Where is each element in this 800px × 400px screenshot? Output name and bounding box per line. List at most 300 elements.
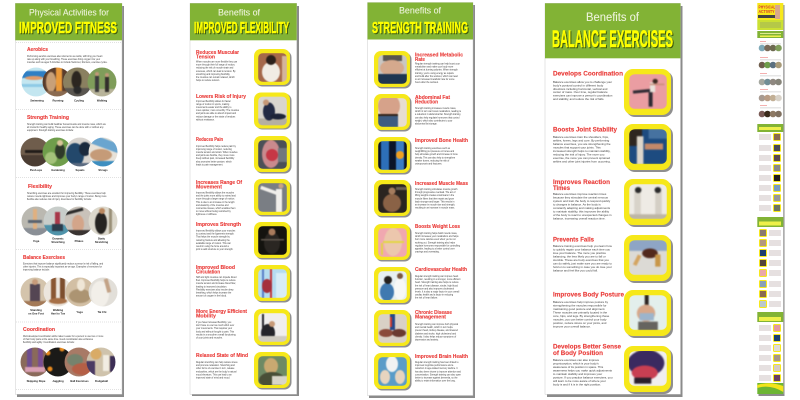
benefit: increases range of movement: to move without being restricted by — [196, 210, 232, 213]
benefit: cardiovascular health — [415, 267, 467, 300]
activity labels: Yoga — [33, 239, 40, 243]
benefit: reduces muscular tension: When muscles are more flexible they can — [196, 60, 238, 64]
photo: ball exercises — [64, 348, 90, 376]
benefit: abdominal fat reduction: weight, which also contributes to your — [415, 119, 453, 122]
benefit: boosts joint stability: Balance exercises train the shoulders, hips, — [553, 135, 609, 139]
section: flexibility: Stretching exercises are excellent for improving flexibility. These exercises help — [27, 192, 106, 195]
benefit: increased muscle mass: through progressive overload. The act of — [415, 191, 456, 194]
benefit: boosts joint stability: Boosts Joint Stability — [553, 126, 617, 134]
tile: muscular man — [374, 180, 412, 218]
activity labels: Stretching — [51, 240, 65, 244]
activity labels: Squats — [76, 168, 85, 172]
benefit: increased metabolic rate: Increased Metabolic — [415, 52, 463, 58]
benefit: chronic disease management: and mental health, which in turn helps — [415, 326, 454, 329]
benefit: more energy efficient mobility: of your joints and muscles. — [196, 336, 223, 340]
benefit: improves reaction times: because they stimulate the central nervous — [553, 196, 609, 200]
benefit: increased muscle mass: back stronger and larger. This results in — [415, 200, 455, 203]
section: strength training: Strength training can build healthier bones/muscle and muscle mass, which are — [27, 123, 107, 126]
tile: man stretching at desk — [254, 309, 292, 346]
activity labels: Dynamic — [52, 236, 64, 240]
section: flexibility: flexible also reduces risk of injury. Exercises for flexibility include: — [27, 198, 92, 201]
benefit: develops better sense of body position: to maintain stability and improves your — [553, 372, 602, 376]
panel: physical activities for improved fitness — [15, 3, 124, 397]
benefit: abdominal fat reduction — [415, 95, 462, 126]
benefit: improved blood circulation: breathing, which helps increase the — [196, 292, 232, 294]
benefit: reduces pain: Reduces Pain — [196, 137, 223, 143]
benefit: develops coordination: directions including horizontal, vertical and — [553, 87, 608, 91]
benefit: more energy efficient mobility: Mobility — [196, 314, 216, 320]
section: balance exercises: Balance Exercises — [23, 255, 65, 261]
mini header: physical activity: PHYSICAL — [758, 4, 776, 10]
section: aerobics — [21, 47, 117, 102]
header: improved flexibility — [190, 3, 297, 40]
benefit: chronic disease management: obesity. It also helps reduce symptoms of — [415, 335, 456, 338]
benefit: improves reaction times: Improves Reaction — [553, 179, 610, 186]
section: strength training — [20, 115, 122, 172]
benefit: improves body posture: improve your overall balance. — [553, 324, 591, 328]
benefit: develops better sense of body position: Balance exercises can also improve — [553, 358, 600, 362]
benefit: reduces muscular tension: Reduces Muscular — [196, 50, 239, 56]
photo: swimming — [22, 68, 46, 96]
benefit: more energy efficient mobility: your movements. That requires your — [196, 327, 232, 330]
benefit: improved brain health: reduction in age-related memory decline. It — [415, 367, 458, 370]
benefit: lowers risk of injury: Lowers Risk of Injury — [196, 94, 246, 100]
benefit: improves strength: available range of motion. This can — [196, 242, 232, 245]
benefit: reduces pain: improving range of motion, reducing — [196, 148, 233, 151]
photo: static stretching — [88, 206, 118, 236]
benefit: boosts weight loss: cravings and overeating. — [415, 251, 440, 254]
activity labels: Cycling — [74, 98, 84, 102]
benefit: improves body posture: core, hips, and legs. By strengthening these — [553, 314, 610, 318]
benefit: improved bone health: Improved Bone Health — [415, 138, 468, 144]
activity labels: Yoga — [76, 310, 83, 314]
benefit: develops coordination: and stability, and reduce the risk of falls. — [553, 97, 604, 101]
benefit: improved blood circulation: Improved Blood — [196, 265, 235, 271]
benefit: improved bone health: help stimulate growth and increase in bone — [415, 153, 459, 156]
benefit: increased metabolic rate: Regular strength training can help boost your — [415, 62, 460, 66]
benefit: cardiovascular health: heart. Strength training also helps to reduce — [415, 281, 459, 284]
benefit: improves strength: That helps the muscle strength by — [196, 236, 231, 239]
benefit: improves strength: result in using the force around a — [196, 245, 230, 248]
benefit: improves reaction times: to changes in balance. As the body is — [553, 202, 601, 206]
benefit: improves strength: joint to add structure to your strength. — [195, 248, 234, 251]
benefit: increases range of movement: move through a larger range of motion. — [196, 198, 235, 201]
benefit: improved brain health: improved cognitive performance and a — [415, 364, 454, 367]
header: improved fitness: Physical Activities for — [29, 8, 109, 18]
benefit: increased muscle mass: Increased Muscle Mass — [415, 181, 468, 187]
photo: standing on one foot — [20, 278, 46, 306]
tile: woman balancing on one leg — [624, 69, 673, 117]
benefit: improved brain health — [415, 354, 468, 383]
benefit: develops better sense of body position: body is and if it is in the right position. — [553, 382, 601, 386]
benefit: improves body posture — [553, 292, 624, 328]
benefit: increases range of movement: tightness or stiffness. — [196, 213, 217, 216]
tile: woman posture from behind — [624, 290, 673, 338]
photo: push-ups — [20, 138, 46, 166]
tile: joint stability — [624, 124, 673, 172]
benefit: increased metabolic rate: and build after the workout, which can lead — [415, 75, 458, 78]
activity labels: Skipping Rope — [27, 379, 46, 383]
benefit: prevents falls: Balance training exercises help you learn how — [553, 244, 613, 248]
photo: dynamic stretching — [44, 206, 68, 236]
benefit: reduces muscular tension: Tension — [196, 54, 215, 60]
header: strength training: Benefits of — [399, 6, 441, 16]
header: balance exercises: Benefits of — [586, 12, 640, 24]
activity labels: Ball Exercises — [70, 379, 89, 383]
benefit: increased muscle mass: resulting in an increase in muscle mass. — [415, 207, 455, 210]
benefit: increased metabolic rate: metabolism and make your body more — [415, 66, 454, 69]
benefit: improves reaction times — [553, 179, 612, 220]
panel: benefits of improved flexibility — [190, 3, 299, 396]
tile: painful hip — [254, 136, 292, 174]
benefit: boosts weight loss: regulate hormones responsible for controlling — [415, 244, 461, 247]
activity labels: Shrugs — [98, 168, 108, 172]
photo: running — [42, 68, 68, 96]
activity labels: Swimming — [30, 98, 44, 102]
photo: dodgeball — [86, 347, 116, 377]
benefit: prevents falls: balance and feel like you could fall. — [553, 268, 598, 272]
header: improved fitness: IMPROVED FITNESS — [19, 20, 117, 37]
benefit: increases range of movement: Movement — [196, 184, 222, 190]
benefit: improves body posture: muscles, you can better control your body — [553, 318, 607, 322]
benefit: relaxed state of mind: and promote relaxation. Stretching and — [196, 364, 236, 367]
panel: benefits of strength training — [368, 2, 475, 398]
panel: full combined miniature poster — [757, 3, 784, 396]
section: coordination — [20, 327, 116, 383]
benefit: improved brain health: concentration. Strength training can also open — [415, 373, 462, 376]
benefit: prevents falls: balancing, the less likely you are to fall or — [553, 254, 606, 258]
tile: leg stretch — [254, 179, 292, 216]
benefit: improved blood circulation: Circulation — [196, 270, 220, 276]
benefit: increases range of movement: connective tissues, which enables them — [196, 207, 236, 210]
activity labels: Walking — [97, 98, 107, 102]
benefit: cardiovascular health: Cardiovascular Health — [415, 267, 467, 273]
benefit: improves reaction times: balance, increasing overall reaction time. — [553, 216, 606, 220]
header: strength training: STRENGTH TRAINING — [372, 20, 468, 37]
benefit: develops coordination — [553, 70, 623, 101]
benefit: improves body posture: strengthening the muscles responsible for — [553, 304, 607, 308]
section: flexibility — [21, 184, 118, 244]
benefit: develops coordination: Balance exercises allow you to challenge your — [553, 80, 612, 84]
benefit: relaxed state of mind: Relaxed State of Mind — [196, 353, 248, 359]
benefit: prevents falls: stumble. These are body exercises that you — [553, 258, 609, 262]
benefit: reduces muscular tension: reducing the risk of muscle strain and — [196, 67, 234, 70]
benefit: abdominal fat reduction: Reduction — [415, 100, 438, 106]
activity labels: Standing — [30, 308, 42, 312]
photo: shrugs — [88, 138, 118, 166]
benefit: improves reaction times: constantly adapting and making adjustments — [553, 206, 611, 210]
benefit: boosts weight loss: appetite, leading to a better control over — [415, 248, 455, 250]
benefit: develops better sense of body position — [553, 344, 621, 386]
benefit: develops better sense of body position: will learn to be more aware of where your — [553, 379, 606, 383]
activity labels: Running — [53, 98, 64, 102]
mini tiles: balance benefits — [759, 324, 781, 382]
mini banner: balance exercises — [757, 312, 783, 322]
benefit: increases range of movement: Improved flexibility allows the muscles — [196, 192, 235, 194]
benefit: relaxed state of mind: endorphins, which are the body's natural — [196, 370, 237, 373]
benefit: increases range of movement: This is due to an increase in the length — [196, 201, 235, 204]
mini footer band — [757, 383, 783, 394]
photo: pilates — [64, 206, 91, 236]
benefit: cardiovascular health: the risk of heart failure. — [415, 297, 438, 300]
section: balance exercises: Exercises that improve balance significantly reduce a person's risk of falling, and — [23, 262, 104, 266]
benefit: lowers risk of injury: movements easier and the ability to — [196, 106, 232, 109]
activity labels: Juggling — [52, 379, 64, 383]
tile: knee x-ray — [374, 137, 412, 174]
activity labels: Heel to Toe — [51, 312, 66, 316]
benefit: boosts weight loss: burn more calories even when you're not — [415, 238, 456, 241]
benefit: improved blood circulation: Flexibility exercises also involve deep — [196, 288, 234, 291]
benefit: improved blood circulation: amount of oxygen in the blood. — [196, 295, 227, 298]
mini banner: strength training — [757, 217, 783, 227]
benefit: abdominal fat reduction: abdominal fat storage. — [415, 122, 438, 126]
benefit: abdominal fat reduction: Strength training increases muscle mass, — [415, 107, 457, 110]
activity labels: Stretching — [95, 240, 108, 244]
tile: falling blocks — [624, 235, 673, 283]
benefit: develops better sense of body position: awareness of its position in space. This — [553, 365, 604, 369]
benefit: improves body posture: Improves Body Posture — [553, 292, 624, 298]
benefit: lowers risk of injury: move quicker, more smoothly. The muscles — [196, 109, 240, 112]
benefit: improves strength: reducing fracture and allowing the — [196, 239, 231, 242]
mini tiles: flexibility benefits — [759, 133, 781, 212]
benefit: abdominal fat reduction: Abdominal Fat — [415, 95, 450, 101]
benefit: increases range of movement: and the joints more ability to extend and — [196, 195, 237, 198]
benefit: improved bone health: Strength training exercises such as — [415, 147, 451, 150]
benefit: improved brain health: better to increase against dementia, so the — [415, 376, 458, 380]
tile: woman stretching — [254, 49, 292, 86]
benefit: increased muscle mass: lifting weights creates small tears in the — [415, 194, 455, 197]
photo: tai chi — [88, 277, 118, 307]
section: flexibility: reduce muscle tightness and improves your body's range of motion. Being more — [27, 195, 107, 198]
benefit: improves reaction times: to maintain stability, this improves the ability — [553, 210, 610, 214]
tile: waist pinch — [374, 94, 412, 132]
section: aerobics: Aerobics — [27, 47, 48, 53]
benefit: improves body posture: position, reduce stress on your joints, and — [553, 321, 607, 325]
section: flexibility: Flexibility — [28, 184, 52, 190]
benefit: reduces pain: and joints are flexible, they move more — [196, 154, 235, 157]
benefit: relaxed state of mind — [196, 353, 248, 380]
benefit: chronic disease management: Chronic Disease — [415, 310, 452, 316]
benefit: relaxed state of mind: other forms of exercise in turn, release — [196, 367, 235, 370]
benefit: improved bone health: weightlifting put pressure on bones and — [415, 150, 455, 153]
activity labels: Walking — [53, 308, 63, 312]
benefit: develops better sense of body position: Develops Better Sense — [553, 344, 621, 350]
photo: yoga balance — [66, 278, 92, 306]
section: balance exercises: improving balance include: — [23, 268, 50, 272]
benefit: improved brain health: has also been shown to improve attention and — [415, 370, 462, 373]
benefit: reduces pain: Improved flexibility helps reduce pain by — [196, 145, 237, 148]
photo: gardening — [42, 138, 68, 166]
tile: reaction times fencing — [624, 179, 673, 227]
benefit: improved bone health: osteoporosis and fractures. — [415, 162, 443, 166]
benefit: prevents falls: hold on to something in case you do lose your — [553, 265, 612, 269]
benefit: improved blood circulation — [196, 265, 237, 298]
benefit: reduces muscular tension: helps to reduce tension. — [196, 79, 220, 82]
benefit: improved bone health: density. This can also help to strengthen — [415, 156, 456, 159]
tile: glowing brain hands — [374, 353, 412, 390]
tile: abdomen hands — [374, 51, 412, 88]
tile: silhouette double exposure — [624, 346, 673, 394]
benefit: lowers risk of injury: reduce damage or the strain of tendons — [196, 115, 236, 118]
benefit: improved bone health: weaker bones, reducing the risk of — [415, 159, 450, 162]
benefit: increased metabolic rate: Rate — [415, 57, 425, 63]
photo: skipping rope — [20, 348, 46, 376]
benefit: boosts joint stability: ankles and other joint injuries from occurring. — [553, 160, 611, 164]
section: aerobics: muscles such as ages 5 Activities to include Swimmer, Runners, exercise cycles. — [27, 61, 108, 64]
benefit: increased metabolic rate: efficient at burning calories. When strength — [415, 69, 458, 72]
benefit: increased metabolic rate: to an increased metabolic rate for some — [415, 78, 455, 81]
benefit: lowers risk of injury: without resistance. — [196, 118, 215, 121]
benefit: boosts weight loss: Boosts Weight Loss — [415, 224, 460, 230]
section: aerobics: rate up along with your breathing. These exercises bring oxygen into your — [27, 58, 100, 61]
benefit: relaxed state of mind: improved state of mind and mood. — [196, 376, 230, 380]
benefit: lowers risk of injury: range of motion in sports, making — [196, 103, 230, 106]
header: improved fitness: IMPROVED FITNESS — [20, 21, 118, 38]
benefit: improves strength — [195, 222, 241, 251]
tile: woman with weights — [254, 222, 292, 260]
section: balance exercises: other injuries. This is especially important as we age. Examples of exercises for — [23, 266, 102, 268]
tile: woman with knee injury — [254, 92, 292, 130]
benefit: abdominal fat reduction: can also help regulate hormones that control — [415, 116, 460, 119]
benefit: increases range of movement — [196, 180, 242, 216]
tile: measuring tape waist — [374, 224, 412, 262]
photo: cycling — [63, 68, 90, 96]
benefit: prevents falls: can do safely, just make sure you are ready to — [553, 262, 612, 266]
header: strength training — [368, 2, 473, 40]
benefit: reduces muscular tension: move through their full range of motion, — [196, 64, 236, 67]
benefit: boosts joint stability — [553, 126, 617, 164]
panel: benefits of balance exercises — [545, 3, 682, 397]
benefit: increased metabolic rate — [415, 52, 463, 84]
photo: yoga — [22, 206, 47, 236]
benefit: prevents falls: lose your balance. The more you practice — [553, 251, 606, 255]
benefit: improved blood circulation: Stiff and tight muscles can impede blood — [196, 276, 237, 279]
benefit: improved brain health: Regular strength training has been linked to — [415, 361, 459, 364]
benefit: relaxed state of mind: mood elevators. This can lead to an — [196, 373, 232, 376]
benefit: more energy efficient mobility — [196, 309, 247, 340]
section: balance exercises — [20, 255, 118, 316]
benefit: increased muscle mass — [415, 181, 468, 210]
benefit: improves body posture: Balance exercises help improve posture by — [553, 300, 609, 304]
benefit: develops coordination: body's postural control in different body — [553, 83, 604, 87]
benefit: abdominal fat reduction: a reduction in abdominal fat. Strength training — [415, 113, 461, 116]
benefit: increased metabolic rate: training, you're using energy as repairs — [415, 72, 455, 75]
benefit: boosts weight loss: Strength training helps build muscle mass, — [415, 232, 458, 235]
benefit: develops better sense of body position: proprioception, which is your body's — [553, 362, 599, 366]
header: improved flexibility: IMPROVED FLEXIBILITY — [194, 20, 289, 37]
benefit: more energy efficient mobility: results in a smoother overall functioning — [196, 333, 236, 336]
benefit: prevents falls: Prevents Falls — [553, 236, 594, 244]
benefit: chronic disease management — [415, 310, 459, 342]
benefit: develops coordination: exercises can improve a person's coordination — [553, 94, 613, 98]
benefit: develops better sense of body position: of Body Position — [553, 350, 603, 357]
mini section: fitness activities — [759, 41, 782, 117]
section: strength training: all crucial for healthy aging. These exercises can be done with or without any — [27, 126, 104, 129]
benefit: reduces pain: muscle tension and strain. When muscles — [196, 151, 238, 154]
benefit: prevents falls: to quickly regain your balance each time you — [553, 248, 610, 252]
benefit: chronic disease management: prevent heart, kidney disease, and lowered — [415, 329, 459, 332]
header: improved fitness — [15, 3, 122, 40]
benefit: reduces pain: also promotes better posture, which — [196, 160, 232, 163]
benefit: improved brain health: Improved Brain Health — [415, 354, 468, 360]
benefit: improved brain health: ability to retain information over the long. — [415, 380, 456, 383]
benefit: improves body posture: These muscles are primarily located in the — [553, 310, 608, 314]
benefit: cardiovascular health: cardiac health and a factor in reducing — [415, 294, 454, 297]
benefit: improved blood circulation: muscle tension and increase blood flow, — [196, 282, 236, 285]
benefit: improves strength: to contract and the ligaments strength. — [196, 233, 235, 236]
activity labels: Pilates — [75, 239, 84, 243]
benefit: improved blood circulation: flow. Improved flexibility helps to reduce — [196, 279, 236, 282]
benefit: increased muscle mass: muscle fibers that then repair and grow — [415, 197, 454, 200]
benefit: chronic disease management: diabetes and stroke, high cholesterol and — [415, 332, 457, 335]
benefit: develops better sense of body position: posture. If you practice balance exercises, you — [553, 376, 613, 380]
benefit: lowers risk of injury — [196, 94, 246, 121]
benefit: reduces pain: freely without pain, increased flexibility — [196, 157, 235, 160]
benefit: lowers risk of injury: and joints are able to absorb impact and — [196, 112, 237, 115]
tile: chronic disease medical — [374, 310, 412, 348]
activity labels: Static — [98, 236, 106, 240]
benefit: more energy efficient mobility: More Energy Efficient — [196, 309, 247, 315]
mini tiles: strength benefits — [759, 229, 781, 308]
benefit: reduces muscular tension — [196, 50, 239, 82]
benefit: lowers risk of injury: Improved flexibility allows for faster — [196, 100, 231, 103]
photo: walking — [87, 67, 117, 97]
benefit: reduces muscular tension: stretching and improving flexibility, — [196, 73, 231, 76]
tile: relaxed woman — [254, 352, 292, 390]
activity labels: Gardening — [51, 168, 65, 172]
header: improved flexibility: Benefits of — [218, 8, 260, 18]
section: aerobics: Performing aerobic exercises also referred to as cardio, will bring your heart — [27, 55, 103, 58]
section: strength training: equipment. Strength training exercises include: — [27, 129, 74, 132]
benefit: boosts joint stability: muscles that support your joints. This — [553, 146, 601, 150]
benefit: chronic disease management: depression and anxiety. — [415, 338, 439, 342]
benefit: reduces muscular tension: the muscles can remain relaxed, which — [196, 76, 236, 79]
activity labels: Dodgeball — [95, 379, 108, 383]
benefit: develops coordination: center of mass. Over time, regular balance — [553, 90, 608, 94]
benefit: improved blood circulation: leading to improved circulation. — [196, 285, 227, 288]
benefit: improves reaction times: of the body to react to unexpected changes in — [553, 213, 612, 217]
benefit: boosts joint stability: increased strength helps to maintain stability, — [553, 149, 611, 153]
benefit: improves body posture: maintaining good posture and alignment. — [553, 307, 605, 311]
benefit: cardiovascular health: Regular strength training can improve heart — [415, 275, 459, 278]
photo: squats — [66, 138, 92, 166]
benefit: chronic disease management: Management — [415, 314, 446, 320]
benefit: more energy efficient mobility: If you have increased flexibility, you — [196, 321, 232, 324]
mini header: physical activity: ACTIVITY — [758, 9, 775, 14]
benefit: increased muscle mass: Strength training stimulates muscle growth — [415, 188, 458, 191]
section: coordination: Coordination — [23, 327, 55, 333]
benefit: boosts joint stability: ankles, knees, legs and core. By performing — [553, 138, 610, 142]
mini banner: flexibility — [757, 124, 783, 132]
benefit: reduces pain: leads to pain management. — [196, 163, 224, 166]
benefit: chronic disease management: Strength training can improve both physical — [415, 323, 459, 326]
benefit: reduces muscular tension: soreness, which can lead to tension. By — [196, 70, 236, 73]
benefit: increases range of movement: and elasticity of the muscles and — [196, 204, 229, 207]
benefit: boosts weight loss: working out. Strength training also helps — [415, 241, 456, 244]
benefit: increased muscle mass: an increase in muscle size and strength, — [415, 204, 456, 206]
benefit: cardiovascular health: levels. It is also a major factor in your overall — [415, 290, 460, 294]
benefit: prevents falls — [553, 236, 613, 272]
benefit: improves strength: Improves Strength — [196, 222, 241, 228]
activity labels: Push-ups — [30, 168, 43, 172]
benefit: develops better sense of body position: awareness helps you make quick adjustments — [553, 368, 613, 372]
activity labels: Tai Chi — [98, 310, 107, 314]
activity labels: on One Foot — [28, 312, 44, 316]
benefit: abdominal fat reduction: which in turn can boost metabolism, leading to — [415, 110, 462, 113]
benefit: improves reaction times: Balance exercises improve reaction times — [553, 192, 607, 196]
benefit: cardiovascular health: the risk of heart disease, stroke, high blood — [415, 284, 459, 287]
tile: circulatory system — [254, 265, 292, 302]
